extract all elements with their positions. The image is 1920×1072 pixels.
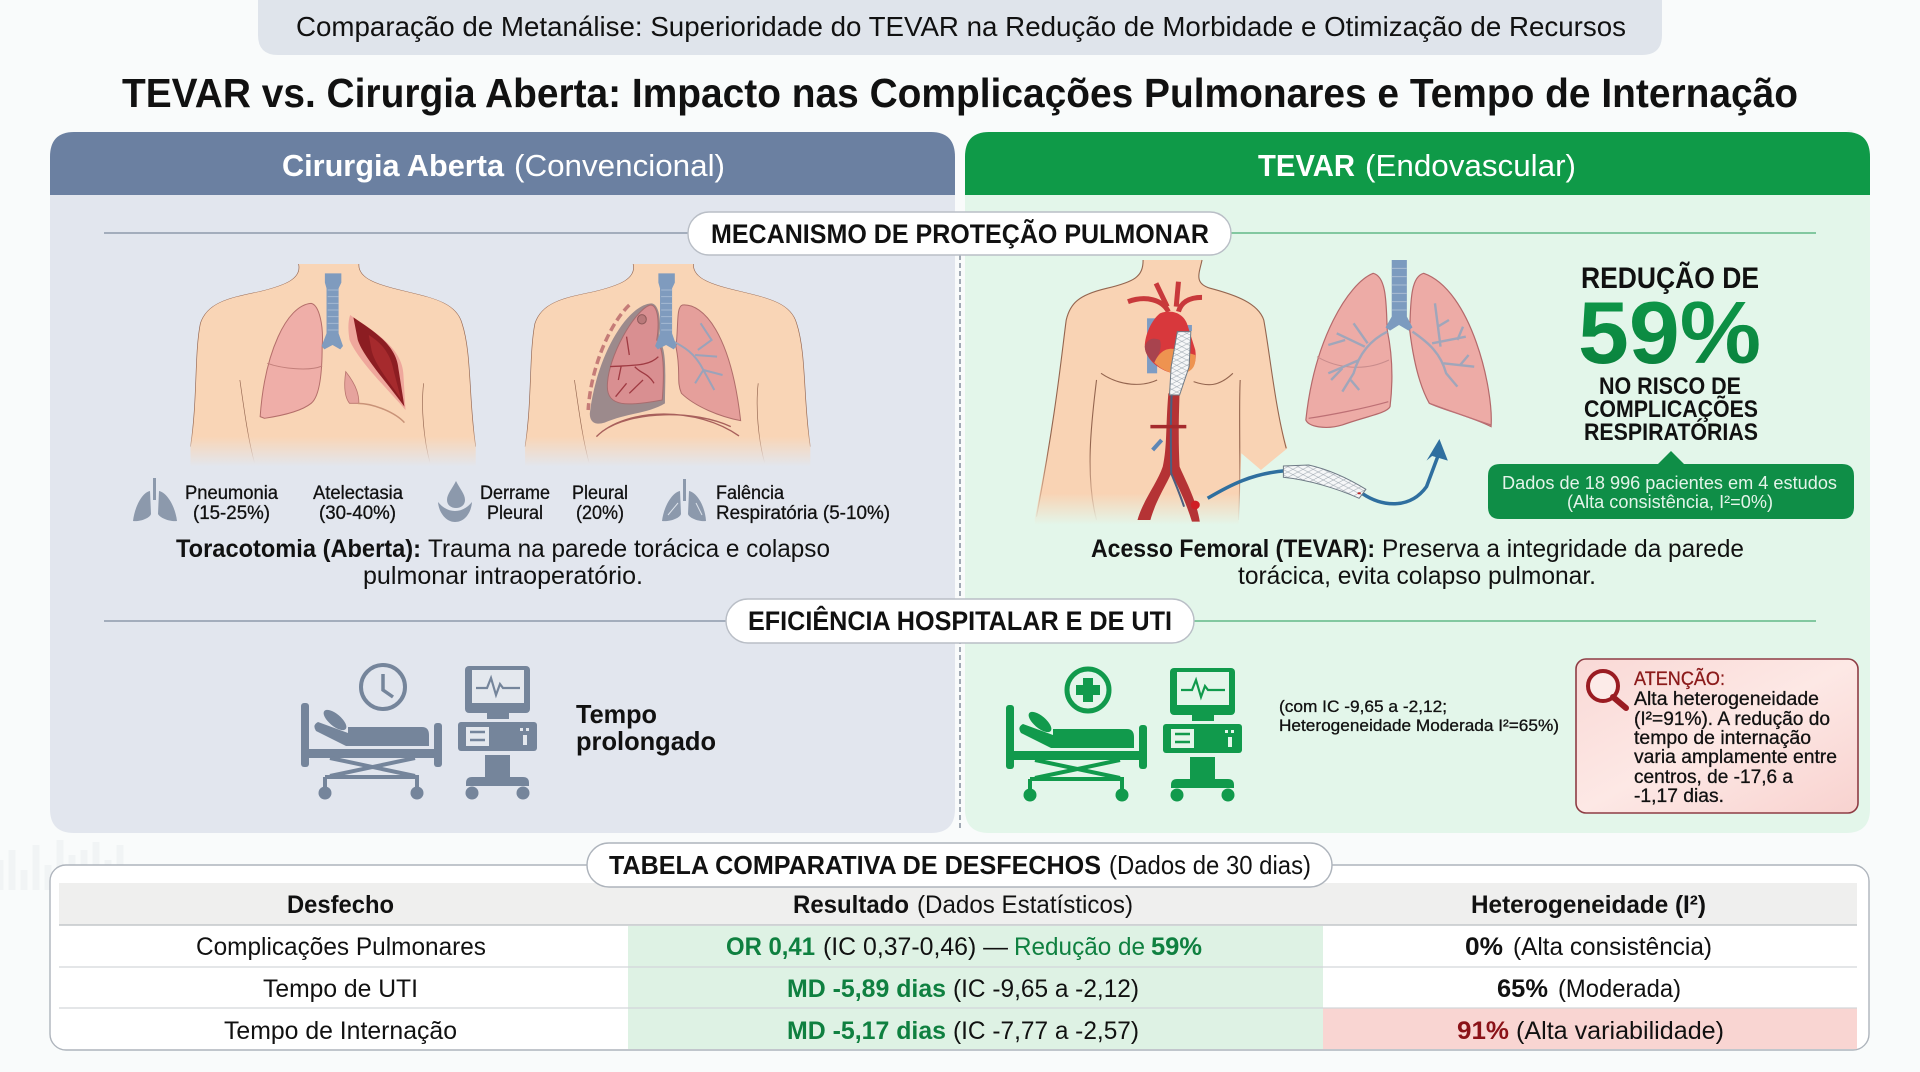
stat: 59 percent reduction: REDUÇÃO DE [1581,261,1759,295]
label: respiratory failure [716,483,890,524]
label: prolonged time: prolongado [576,726,716,756]
label: respiratory failure: Falência [716,483,784,504]
panel: TEVAR [965,132,1870,833]
panel header: TEVAR: (Endovascular) [1365,148,1576,183]
row: ICU time [263,975,1681,1003]
right lung [260,303,322,418]
icon: monitor [458,666,537,800]
text: femoral access description: Acesso Femoral (TEVAR): [1091,535,1375,563]
callout: patient data: (Alta consistência, I²=0%) [1567,492,1773,512]
stat: 59 percent reduction: COMPLICAÇÕES [1584,395,1758,423]
label: pneumonia: Pneumonia [185,483,278,504]
table header row: Resultado [793,891,909,919]
main title: TEVAR vs. Cirurgia Aberta: Impacto nas Complicações Pulmonares e Tempo de Internação [122,70,1798,116]
label: atelectasis: (30-40%) [319,503,396,524]
section divider: lung protection [104,212,1816,255]
table header row: (Dados Estatísticos) [917,891,1133,919]
table header row: Desfecho [287,891,394,919]
text: thoracotomy description: Trauma na parede torácica e colapso [428,535,830,563]
aorta [1137,393,1200,522]
text: thoracotomy description: pulmonar intraoperatório. [363,562,643,590]
heart [1145,312,1196,374]
callout: attention heterogeneity: ATENÇÃO: [1634,668,1725,690]
label: prolonged time [576,699,716,756]
table header row [59,883,1857,925]
label: pleural effusion [480,483,628,524]
bronchi [1328,303,1474,392]
top subtitle banner [258,0,1662,55]
illustration: collapsed lung torso [525,264,810,467]
table header row: Heterogeneidade (I²) [1471,891,1706,919]
table: comparative outcomes [50,843,1869,1050]
icon: clock [361,665,405,709]
row: ICU time: Tempo de UTI [263,975,418,1003]
icon: bed [301,703,442,800]
icon: ICU bed and monitor, open surgery [301,665,537,800]
text: thoracotomy description: Toracotomia (Aberta): [176,535,421,563]
illustration: healthy lungs [1306,260,1491,427]
icon: monitor [1163,668,1242,802]
callout: attention heterogeneity [1576,659,1858,813]
callout: patient data [1488,451,1854,519]
row: pulmonary complications: Redução de [1014,933,1145,961]
callout: attention heterogeneity: tempo de internação [1634,728,1811,749]
label: pleural effusion: Derrame [480,483,550,504]
icon: lungs respiratory failure [662,479,706,521]
icon: ICU bed and monitor, TEVAR [1006,668,1242,802]
trachea [322,273,343,349]
row: ICU time: (IC -9,65 a -2,12) [953,975,1139,1003]
text: ICU confidence interval note: Heterogeneidade Moderada I²=65%) [1279,716,1559,735]
complications list [133,478,890,524]
text: femoral access description: torácica, evita colapso pulmonar. [1238,562,1596,590]
callout: attention heterogeneity: Alta heterogeneidade [1634,689,1819,710]
high variability cell [1323,1008,1857,1049]
row: pulmonary complications: 0% [1465,933,1503,961]
label: prolonged time: Tempo [576,699,657,729]
label: atelectasis: Atelectasia [313,483,403,504]
row: hospital stay: (Alta variabilidade) [1516,1017,1724,1045]
text: femoral access description [1091,535,1744,590]
panel: open surgery [50,132,955,833]
stent in aorta [1169,332,1191,395]
section divider: hospital efficiency [104,599,1816,643]
row: ICU time: 65% [1497,975,1548,1003]
trachea [655,273,676,349]
illustration: open thoracotomy torso [191,264,476,467]
collapsed lung [590,303,665,424]
femoral access point [1191,501,1200,509]
panel header: TEVAR: TEVAR [1258,148,1355,183]
veins [1147,318,1157,373]
text: femoral access description: Preserva a integridade da parede [1382,535,1744,563]
incision [348,315,406,410]
diaphragm [596,414,739,437]
icon: pleural effusion drop [438,481,472,522]
stat: 59 percent reduction: NO RISCO DE [1599,373,1741,400]
stat: 59 percent reduction [1578,261,1761,446]
label: pleural effusion: Pleural [487,503,543,524]
left lung [676,305,741,421]
callout: attention heterogeneity: varia amplamente entre [1634,747,1837,768]
row: ICU time: MD -5,89 dias [787,975,946,1003]
row: hospital stay: 91% [1457,1017,1509,1045]
center dashed divider [959,255,961,830]
collapsed lung flap [345,372,359,403]
arrow: catheter path with stent graft [1208,439,1448,504]
text: ICU confidence interval note [1279,697,1559,735]
trachea [1386,260,1412,331]
callout: attention heterogeneity: (I²=91%). A redução do [1634,709,1830,730]
label: respiratory failure: Respiratória (5-10%) [716,503,890,524]
row: hospital stay: MD -5,17 dias [787,1017,946,1045]
result column shading [628,926,1323,1049]
table title pill: (Dados de 30 dias) [1109,850,1311,880]
icon: magnifying glass [1588,671,1626,708]
bronchi [670,323,723,390]
callout: attention heterogeneity: centros, de -17,6 a [1634,767,1793,788]
row: pulmonary complications [196,933,1712,961]
row: pulmonary complications: (IC 0,37-0,46) — [823,933,1008,961]
label: atelectasis [313,483,403,524]
table title pill [587,843,1332,887]
callout: attention heterogeneity: -1,17 dias. [1634,786,1724,807]
stat: 59 percent reduction: 59% [1578,283,1761,382]
panel header: open surgery: (Convencional) [514,148,725,183]
text: thoracotomy description [176,535,830,590]
top subtitle banner: Comparação de Metanálise: Superioridade do TEVAR na Redução de Morbidade e Otimização de Recursos [296,11,1626,42]
label: pleural effusion: Pleural [572,483,628,504]
row: pulmonary complications: (Alta consistência) [1513,933,1712,961]
panel header: open surgery: Cirurgia Aberta [282,148,505,183]
body [1035,260,1287,527]
callout: patient data: Dados de 18 996 pacientes em 4 estudos [1502,473,1837,493]
row: pulmonary complications: OR 0,41 [726,933,815,961]
row: hospital stay [224,1017,1724,1045]
aortic arch vessels [1128,282,1202,312]
panel header: open surgery [50,132,955,195]
text: ICU confidence interval note: (com IC -9,65 a -2,12; [1279,697,1447,716]
icon: medical cross [1067,669,1109,711]
table title pill: TABELA COMPARATIVA DE DESFECHOS [609,850,1101,880]
section divider: lung protection: MECANISMO DE PROTEÇÃO PULMONAR [711,218,1209,249]
row: hospital stay: Tempo de Internação [224,1017,457,1045]
row: pulmonary complications: Complicações Pulmonares [196,933,486,961]
stat: 59 percent reduction: RESPIRATÓRIAS [1584,418,1758,446]
row: hospital stay: (IC -7,77 a -2,57) [953,1017,1139,1045]
icon: lungs pneumonia [133,478,177,521]
label: pleural effusion: (20%) [576,503,624,524]
label: pneumonia [185,483,278,524]
row: pulmonary complications: 59% [1151,933,1202,961]
label: pneumonia: (15-25%) [193,503,270,524]
icon: bed [1006,705,1147,802]
section divider: hospital efficiency: EFICIÊNCIA HOSPITALAR E DE UTI [748,605,1172,636]
row: ICU time: (Moderada) [1558,975,1681,1003]
illustration: femoral TEVAR access [1035,260,1287,527]
panel header: TEVAR [965,132,1870,195]
